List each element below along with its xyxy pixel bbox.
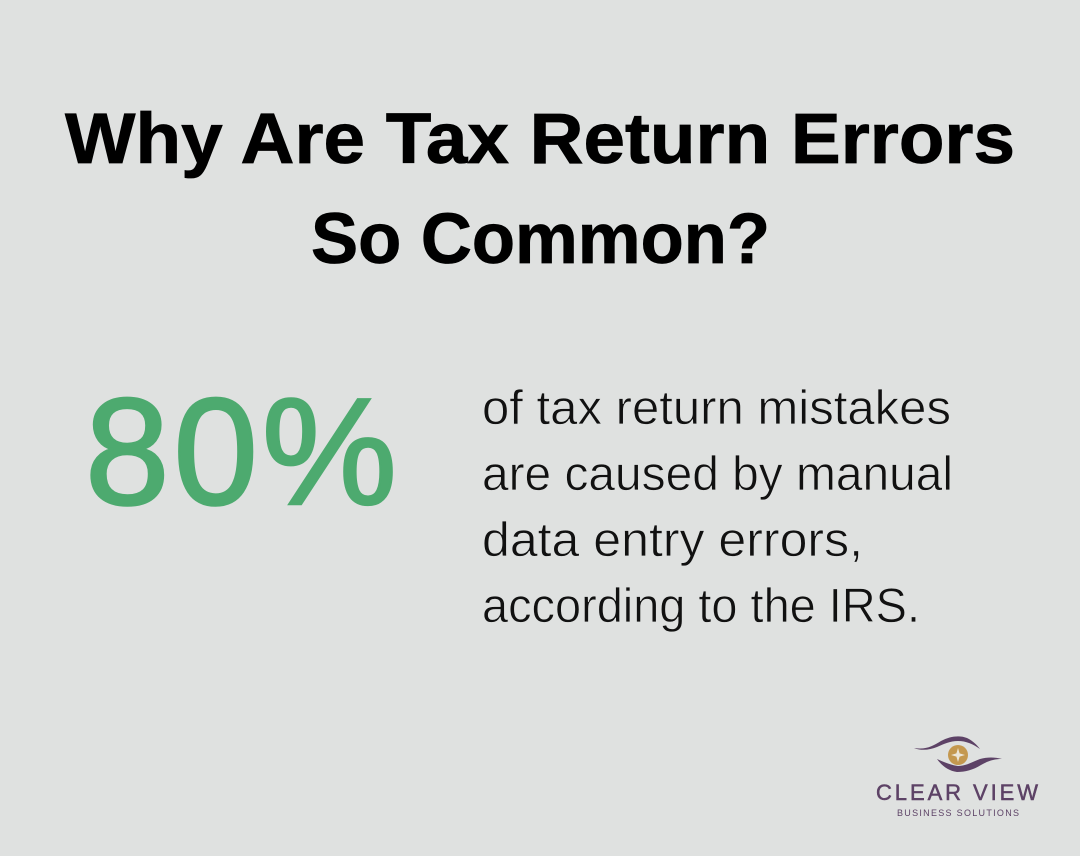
description text: according to the IRS. bbox=[482, 580, 920, 633]
title: So Common? bbox=[311, 200, 770, 279]
description text: are caused by manual bbox=[482, 448, 953, 501]
description text: data entry errors, bbox=[482, 514, 863, 567]
title: Why Are Tax Return Errors bbox=[65, 100, 1015, 179]
logo tagline: BUSINESS SOLUTIONS bbox=[897, 808, 1019, 818]
description text bbox=[482, 382, 953, 633]
icon: eye logo bbox=[914, 736, 1002, 772]
title bbox=[65, 100, 1015, 279]
logo: Clear View Business Solutions bbox=[876, 736, 1038, 818]
description text: of tax return mistakes bbox=[482, 382, 951, 435]
logo wordmark: CLEAR VIEW bbox=[876, 780, 1038, 805]
big statistic: 80%: 80% bbox=[85, 367, 397, 537]
